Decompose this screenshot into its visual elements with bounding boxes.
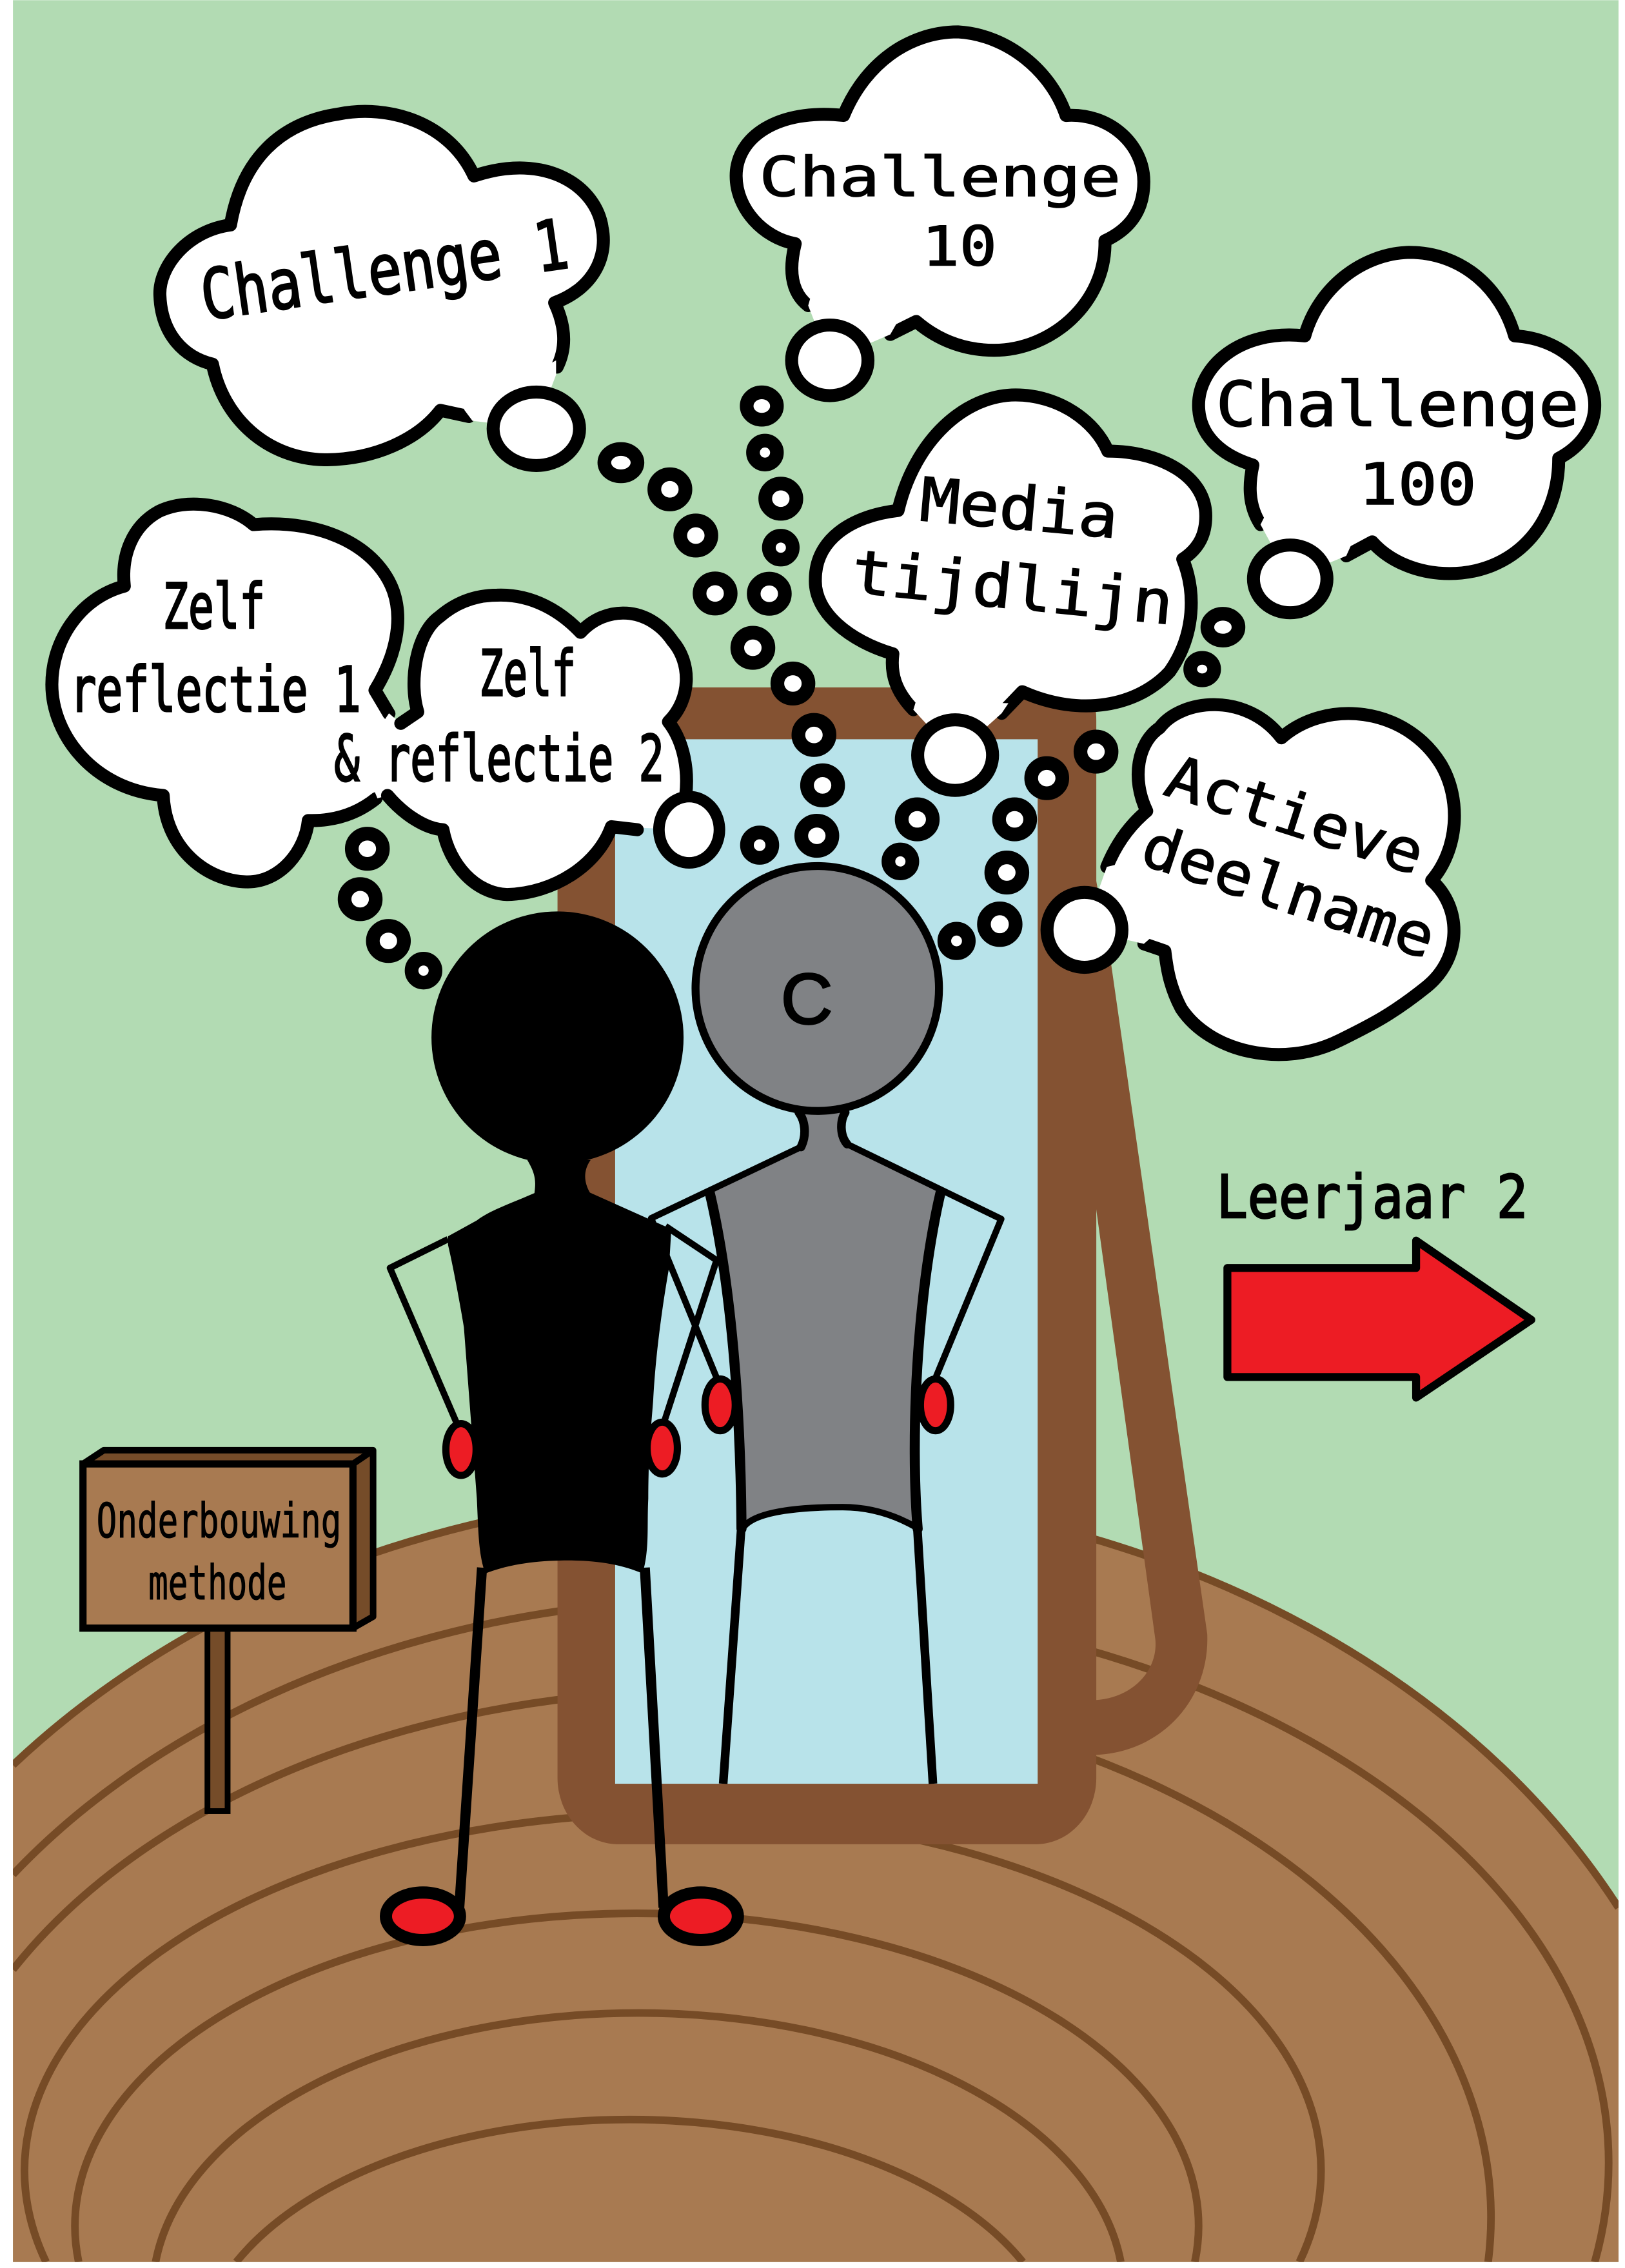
thought bubble: Actieve deelname [1047, 705, 1454, 1054]
reflected grey figure [651, 866, 1001, 1784]
cloud outline lower [388, 796, 637, 894]
thought bubble: Challenge 100 [1199, 252, 1595, 613]
thought bubble: Challenge 10 [736, 32, 1144, 396]
thought bubble: Zelf reflectie 2 [334, 595, 720, 894]
sign box sides [83, 1450, 373, 1628]
thought bubble: Zelf reflectie 1 [52, 504, 398, 882]
cloud fill [360, 595, 689, 894]
text: Actieve [1157, 742, 1432, 889]
sign text: Onderbouwing [97, 1494, 341, 1549]
sign front [83, 1464, 353, 1628]
ground: contour rings [13, 1491, 1619, 2262]
black figure: arms [390, 1226, 716, 1426]
text: deelname [1134, 811, 1444, 972]
cloud outline [160, 112, 604, 460]
grey figure: outlines [651, 1112, 1001, 1784]
black figure: torso [448, 1160, 671, 1573]
text: Challenge [1216, 368, 1579, 440]
text: & reflectie 2 [334, 722, 664, 796]
black figure [386, 911, 738, 1940]
mirror glass [615, 739, 1038, 1784]
grey figure: head [696, 866, 939, 1111]
text: 100 [1359, 451, 1477, 518]
cloud outline [1107, 705, 1454, 1054]
text: Zelf [162, 571, 265, 643]
cloud outline [736, 32, 1144, 350]
thought bubble: Media tijdlijn [815, 395, 1206, 791]
text: reflectie 1 [70, 654, 361, 726]
connector bubble [792, 325, 868, 396]
grey figure: body [710, 1112, 940, 1527]
ground: hill fill [13, 1491, 1619, 2262]
arrow: next year [1227, 1241, 1531, 1397]
connector bubble [659, 796, 720, 863]
text: Challenge 1 [195, 204, 573, 337]
label: Leerjaar 2: Leerjaar 2 [1217, 1163, 1528, 1232]
text: tijdlijn [849, 537, 1177, 639]
text: Zelf [479, 637, 576, 711]
thought dots chains [344, 392, 1239, 983]
black figure: legs [459, 1568, 664, 1908]
black figure: hands [446, 1424, 476, 1475]
cloud outline [52, 504, 398, 882]
black figure: head [431, 911, 684, 1163]
connector bubble [1254, 545, 1327, 613]
sign post [208, 1625, 228, 1811]
connector bubble [918, 720, 992, 791]
cloud outline [815, 395, 1206, 713]
cloud outline [1199, 252, 1595, 573]
mirror frame [558, 687, 1096, 1844]
mirror stand leg [1090, 850, 1207, 1755]
grey figure: hands [705, 1379, 735, 1431]
text: 10 [922, 215, 997, 279]
thought bubble: Challenge 1 [160, 112, 604, 466]
text: Media [917, 465, 1121, 553]
connector bubble [1047, 892, 1122, 967]
cloud outline [401, 595, 687, 796]
connector bubble [493, 392, 580, 466]
signpost: methode [148, 1556, 287, 1611]
grey figure: letter C: C [781, 959, 832, 1040]
signpost [83, 1450, 373, 1811]
text: Challenge [759, 146, 1121, 210]
black figure: feet [386, 1893, 460, 1940]
